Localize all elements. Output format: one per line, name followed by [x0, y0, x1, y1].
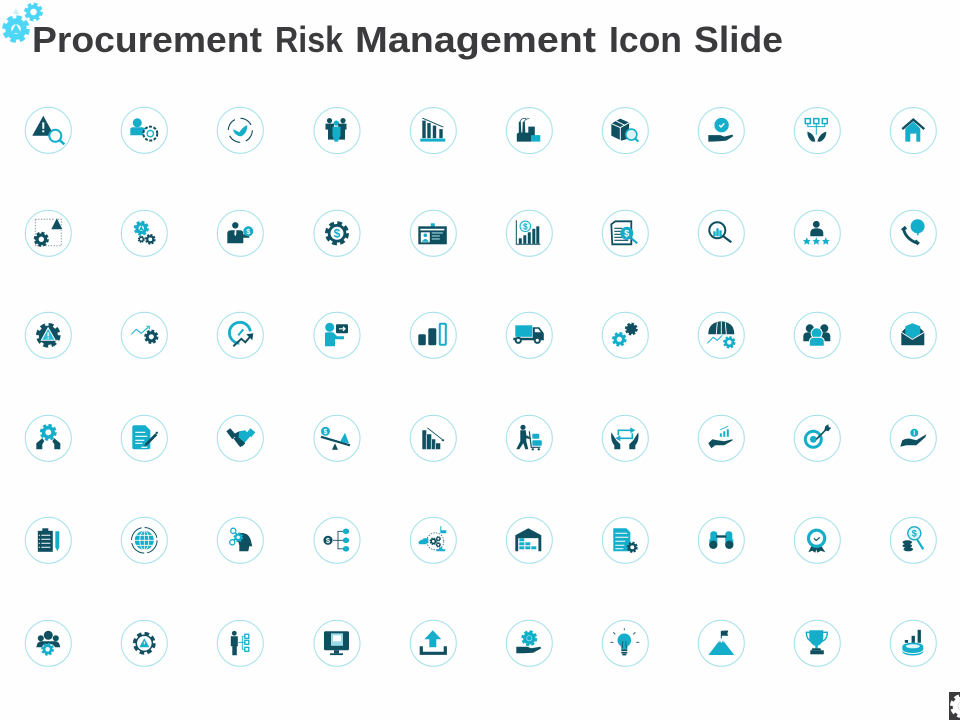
icon: worker with cart — [506, 415, 552, 461]
icon: person with checklist — [217, 620, 263, 666]
icon: binoculars — [698, 517, 744, 563]
icon: hand with coin — [890, 415, 936, 461]
icon: person with stars — [794, 210, 840, 256]
icon: package magnifier — [602, 108, 648, 154]
icon: recycle leaf check — [217, 107, 263, 153]
icon: hands with exchange arrows — [602, 415, 648, 461]
icon: hand with gear — [506, 620, 552, 666]
icon: magnifier chart — [698, 210, 744, 256]
title: Icon — [609, 19, 682, 60]
icon: clipboard and pencil — [25, 517, 71, 563]
icon: document gear — [602, 517, 648, 563]
icon: hand with badge — [698, 108, 744, 154]
title — [32, 19, 783, 60]
icon: warehouse — [506, 517, 552, 563]
icon: presenter with sign — [314, 312, 360, 358]
icon: group of people — [794, 312, 840, 358]
icon: coins magnifier — [890, 517, 936, 563]
icon: document dollar magnifier — [602, 210, 648, 256]
title: Slide — [694, 19, 783, 60]
icon: warning ring gear — [121, 620, 167, 666]
icon: house — [890, 108, 936, 154]
icon: coins magnifier: $ — [912, 529, 917, 539]
icon: open envelope — [890, 312, 936, 358]
icon: business team — [314, 108, 360, 154]
icon: warning magnifier — [25, 107, 71, 153]
icon: target with dart — [794, 415, 840, 461]
icon: dollar chart: $ — [523, 222, 528, 231]
icon: risk matrix — [25, 210, 71, 256]
icon: dollar chart — [506, 210, 552, 256]
icon: delivery truck — [506, 312, 552, 358]
icon: globe with arrows — [121, 517, 167, 563]
icon: descending stairs — [410, 415, 456, 461]
icon: upload arrow — [410, 620, 456, 666]
logo: cyan gears — [5, 4, 41, 40]
icon: warning gear — [25, 312, 71, 358]
icon: id card — [410, 210, 456, 256]
icon: umbrella trend gear — [698, 312, 744, 358]
icon: hand with chart — [698, 415, 744, 461]
icon: person process — [121, 107, 167, 153]
title: Management — [355, 19, 596, 60]
title: Risk — [275, 19, 344, 60]
icon: network plant hands — [794, 108, 840, 154]
icon: declining bars — [410, 108, 456, 154]
icon: mountain flag — [698, 620, 744, 666]
icon: computer monitor — [314, 620, 360, 666]
icon: speedometer arrow — [217, 312, 263, 358]
icon: supply chain — [410, 517, 456, 563]
title: Procurement — [32, 19, 262, 60]
icon: dollar gear — [314, 210, 360, 256]
icon: trend gear — [121, 312, 167, 358]
corner gear block — [949, 692, 960, 720]
icon: award ribbon — [794, 517, 840, 563]
icon: seesaw dollar risk: $ — [324, 429, 328, 436]
icon: bar chart — [410, 312, 456, 358]
icon: phone and speech bubble — [890, 210, 936, 256]
icon: seesaw dollar risk — [314, 415, 360, 461]
icon: dollar network — [314, 517, 360, 563]
icon: businessman with dollar — [217, 210, 263, 256]
icon: team with gear — [25, 620, 71, 666]
icon: head with gears — [217, 517, 263, 563]
icon: document and pen — [121, 415, 167, 461]
icon: coins with chart — [890, 620, 936, 666]
icon: hands and gear — [25, 415, 71, 461]
icon: dollar network: $ — [326, 536, 331, 545]
icon: businessman with dollar: $ — [246, 229, 250, 236]
icon: light bulb — [602, 620, 648, 666]
icon: gears alert — [121, 210, 167, 256]
icon: trophy — [794, 620, 840, 666]
icon: document dollar magnifier: $ — [624, 229, 629, 239]
icon: settings gears — [602, 312, 648, 358]
icon: handshake — [217, 415, 263, 461]
icon: dollar gear: $ — [334, 226, 341, 240]
icon: factory — [506, 108, 552, 154]
